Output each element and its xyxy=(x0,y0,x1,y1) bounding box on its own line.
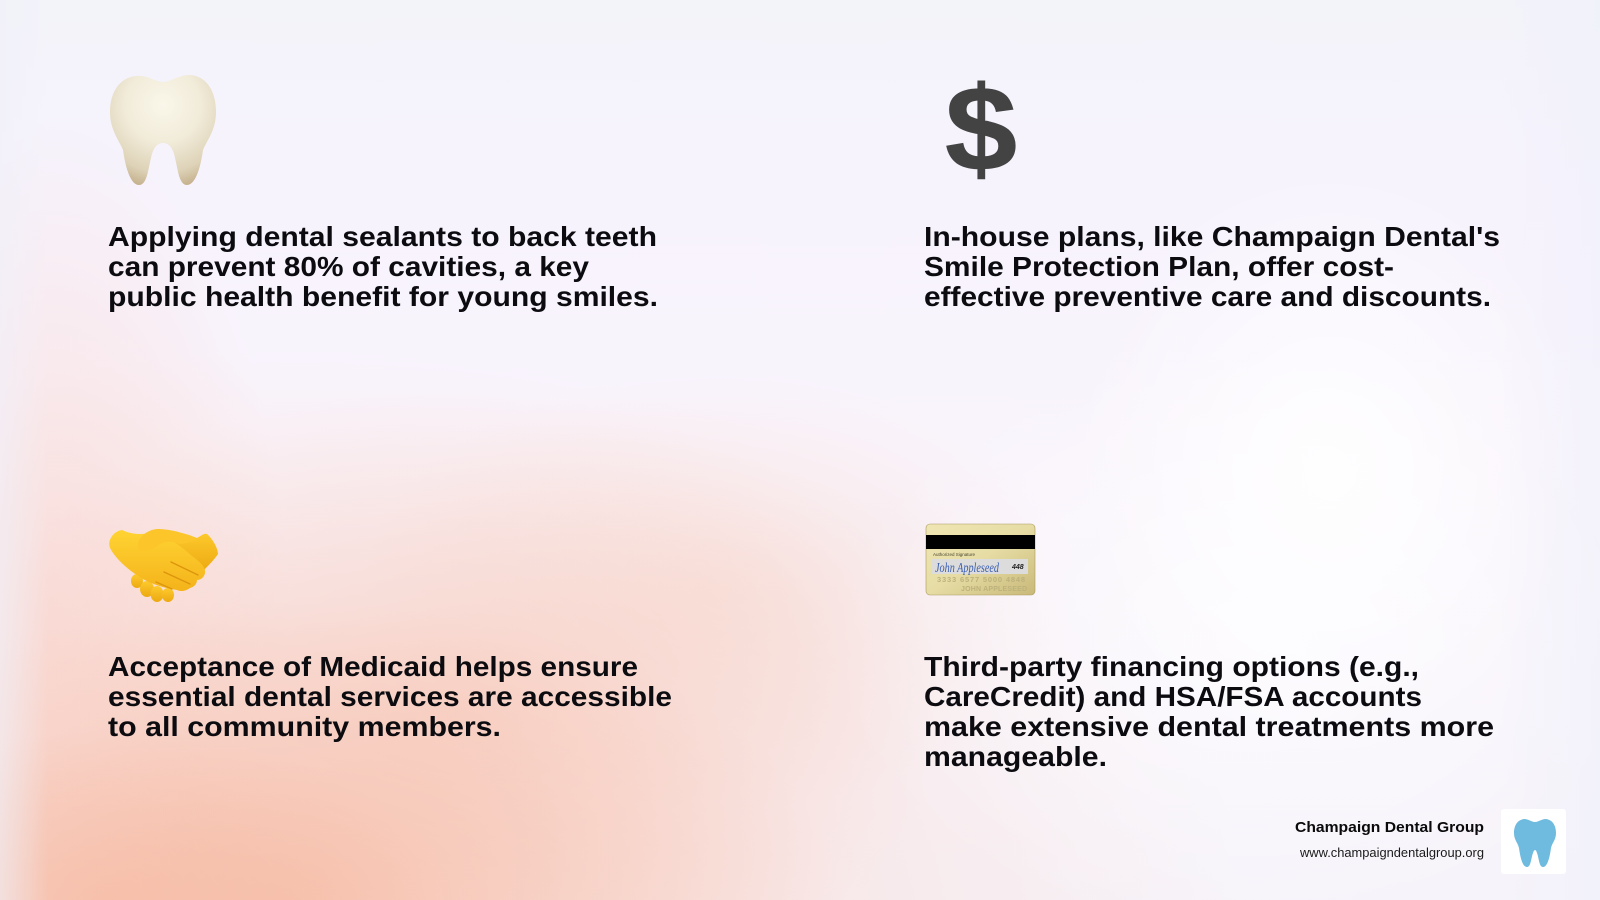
icon: credit card: 3333 6577 5000 4848 xyxy=(937,575,1025,584)
brand name: Champaign Dental Group xyxy=(1295,819,1484,836)
icon: credit card xyxy=(926,524,1035,595)
text: financing: Third-party financing options (e.g., xyxy=(924,651,1419,682)
website url: www.champaigndentalgroup.org xyxy=(1299,846,1484,860)
icon: credit card: 448 xyxy=(1011,564,1024,571)
logo tile xyxy=(1501,809,1566,874)
text: sealants: public health benefit for young smiles. xyxy=(108,281,658,312)
text: sealants: can prevent 80% of cavities, a key xyxy=(108,251,589,282)
icon: credit card: Authorized Signature xyxy=(933,552,976,557)
text: financing xyxy=(924,651,1494,772)
panel: third-party financing xyxy=(924,524,1494,772)
text: sealants xyxy=(108,221,658,312)
text: in-house plans xyxy=(924,221,1500,312)
icon: blue tooth logo xyxy=(1514,819,1556,867)
icon: handshake xyxy=(109,529,218,602)
icon: credit card: John Appleseed xyxy=(935,561,1000,576)
text: financing: manageable. xyxy=(924,741,1107,772)
panel: dental sealants xyxy=(108,75,658,312)
icon: credit card: JOHN APPLESEED xyxy=(961,586,1027,593)
panel: medicaid xyxy=(108,529,672,742)
text: medicaid xyxy=(108,651,672,742)
text: financing: make extensive dental treatments more xyxy=(924,711,1494,742)
text: financing: CareCredit) and HSA/FSA accounts xyxy=(924,681,1422,712)
panel: in-house plans xyxy=(924,62,1500,312)
text: in-house plans: In-house plans, like Champaign Dental's xyxy=(924,221,1500,252)
text: medicaid: Acceptance of Medicaid helps ensure xyxy=(108,651,638,682)
text: in-house plans: Smile Protection Plan, offer cost- xyxy=(924,251,1394,282)
footer branding xyxy=(1295,809,1566,874)
text: medicaid: essential dental services are accessible xyxy=(108,681,672,712)
icon: dollar sign: $ xyxy=(945,62,1017,196)
text: medicaid: to all community members. xyxy=(108,711,501,742)
text: in-house plans: effective preventive care and discounts. xyxy=(924,281,1491,312)
icon: tooth xyxy=(110,75,216,185)
text: sealants: Applying dental sealants to back teeth xyxy=(108,221,657,252)
